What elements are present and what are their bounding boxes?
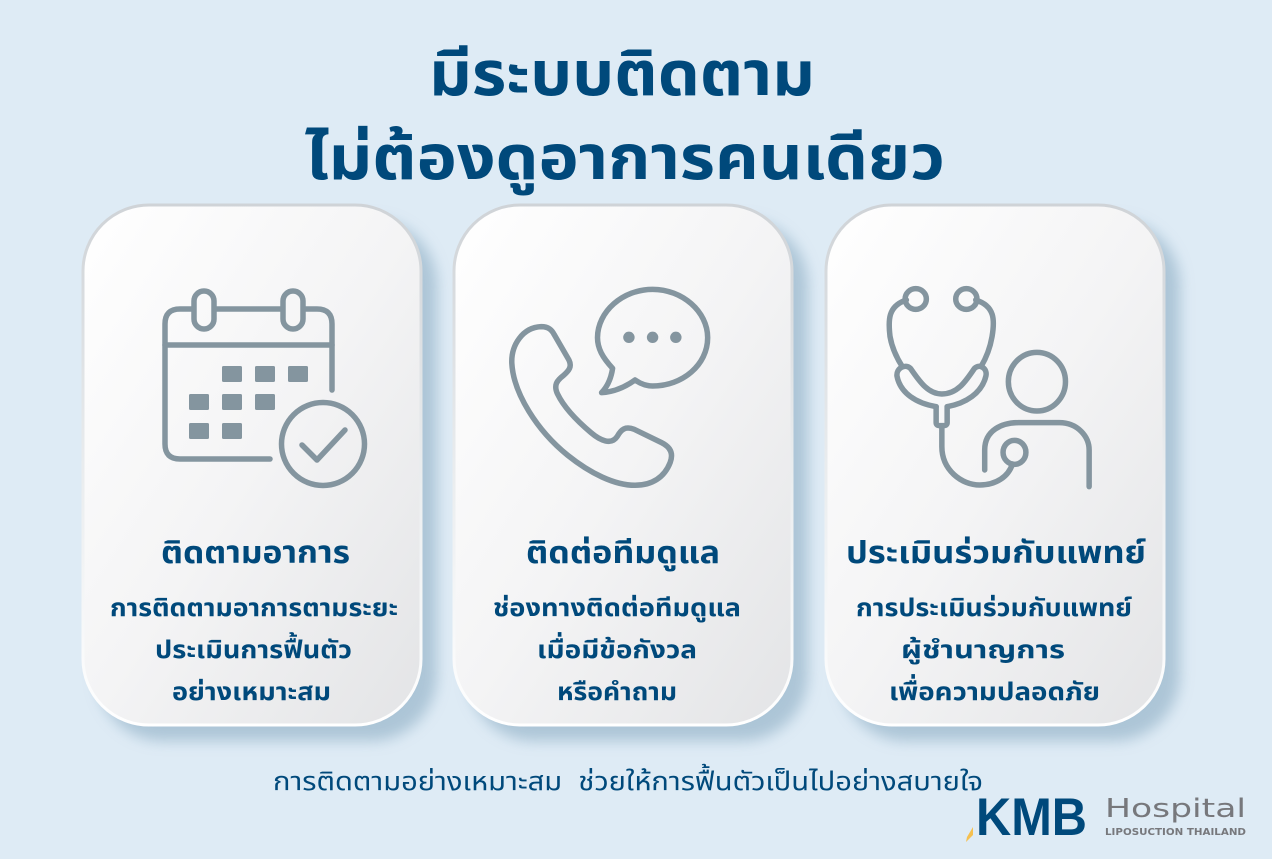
text block: track symptoms: อย่างเหมาะสม bbox=[172, 678, 331, 706]
icon: logo accent bbox=[966, 827, 973, 842]
footer note: การติดตามอย่างเหมาะสม ช่วยให้การฟื้นตัวเป็นไปอย่างสบายใจ bbox=[273, 763, 983, 796]
text block: assess with doctor bbox=[856, 594, 1132, 706]
title: มีระบบติดตาม bbox=[429, 40, 815, 109]
icon: phone with speech bubble bbox=[512, 289, 708, 485]
panel: contact care team bbox=[454, 205, 808, 741]
text block: assess with doctor: การประเมินร่วมกับแพทย์ bbox=[856, 594, 1132, 622]
title: ไม่ต้องดูอาการคนเดียว bbox=[305, 124, 945, 196]
icon: calendar with check bbox=[165, 291, 364, 486]
text block: track symptoms: ประเมินการฟื้นตัว bbox=[155, 632, 352, 664]
logo hospital text: Hospital bbox=[1105, 794, 1246, 824]
heading: assess with doctor: ประเมินร่วมกับแพทย์ bbox=[846, 535, 1146, 570]
text block: assess with doctor: เพื่อความปลอดภัย bbox=[889, 674, 1100, 706]
text block: contact care team bbox=[493, 594, 741, 706]
panel: track symptoms bbox=[83, 205, 437, 741]
heading: track symptoms: ติดตามอาการ bbox=[161, 535, 350, 570]
logo tagline: LIPOSUCTION THAILAND bbox=[1105, 827, 1246, 838]
logo wordmark: KMB bbox=[976, 788, 1087, 847]
text block: assess with doctor: ผู้ชำนาญการ bbox=[901, 636, 1065, 665]
icon: stethoscope and patient bbox=[889, 289, 1089, 487]
heading: contact care team: ติดต่อทีมดูแล bbox=[526, 535, 720, 571]
text block: contact care team: ช่องทางติดต่อทีมดูแล bbox=[493, 594, 741, 623]
text block: contact care team: เมื่อมีข้อกังวล bbox=[537, 632, 697, 664]
text block: track symptoms: การติดตามอาการตามระยะ bbox=[110, 594, 398, 622]
panel: assess with doctor bbox=[826, 205, 1180, 741]
text block: track symptoms bbox=[110, 594, 398, 706]
title bbox=[305, 40, 945, 196]
text block: contact care team: หรือคำถาม bbox=[557, 678, 677, 706]
logo: KMB Hospital bbox=[966, 788, 1246, 847]
